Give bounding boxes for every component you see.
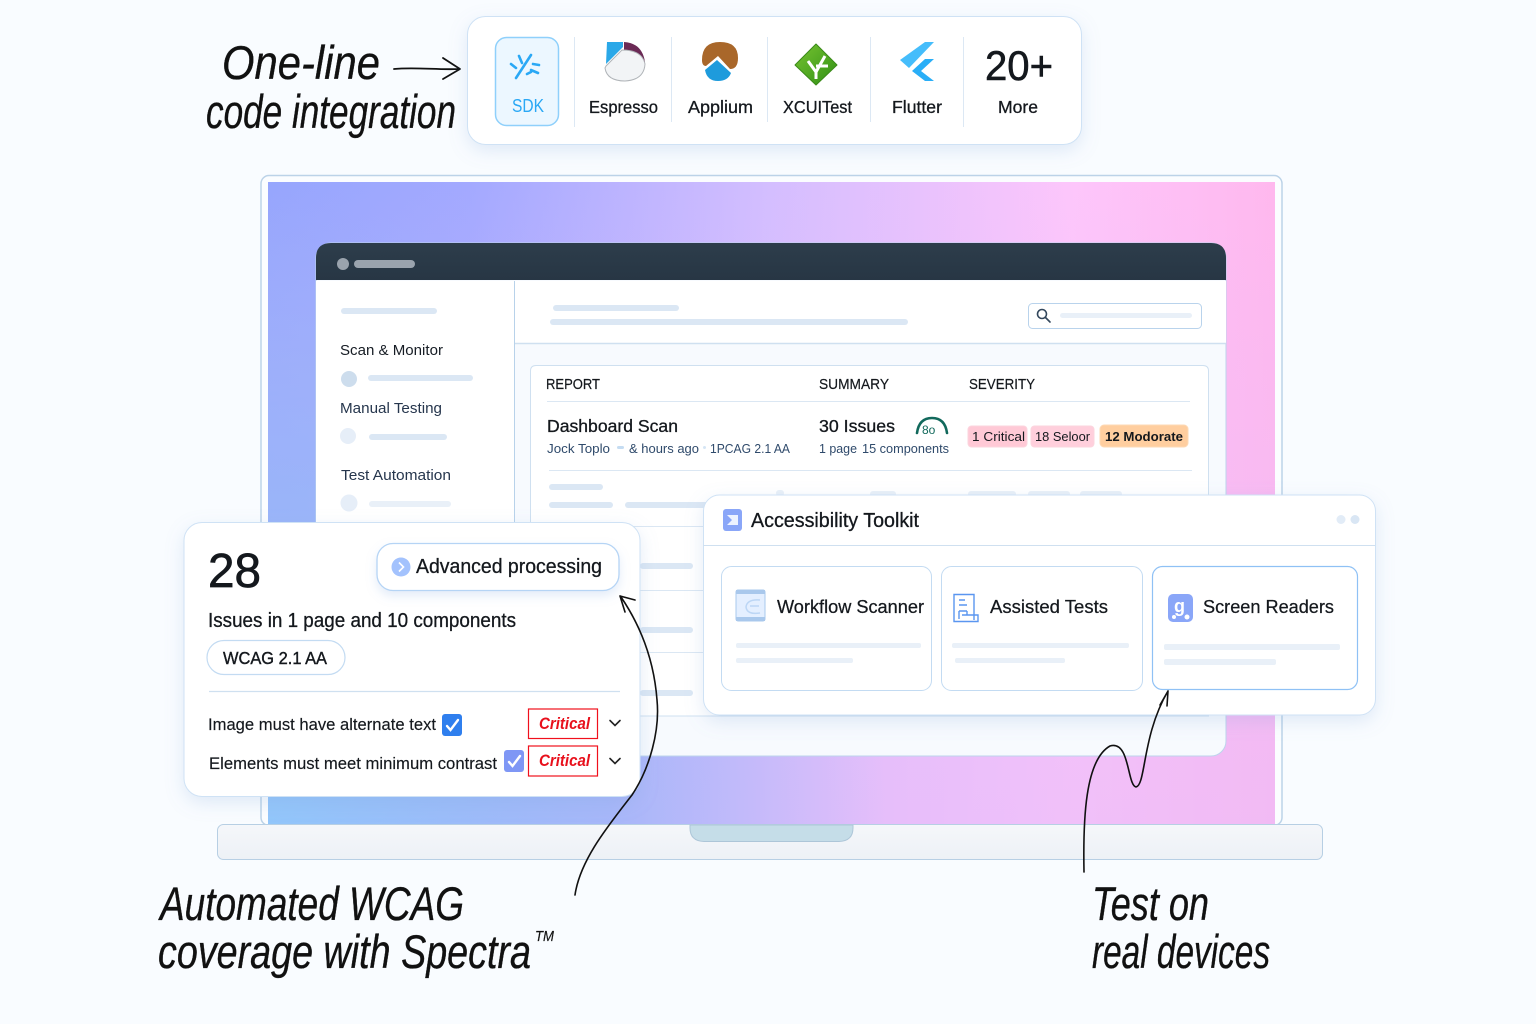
main header — [515, 281, 1226, 344]
report title and meta: & hours ago — [629, 441, 699, 456]
report card — [530, 366, 1208, 716]
handwritten note: automated WCAG coverage: coverage with Spectra — [158, 925, 531, 978]
table header — [546, 377, 1035, 393]
more count: 20+ — [985, 42, 1053, 89]
WCAG pill: WCAG 2.1 AA — [223, 648, 327, 668]
nav item: test automation: Test Automation — [341, 468, 451, 484]
tool card: screen readers: Screen Readers — [1203, 596, 1334, 617]
tool card: assisted tests — [942, 566, 1142, 690]
tool card: screen readers — [1152, 566, 1358, 690]
issue summary: 1 page — [819, 441, 857, 456]
table header: SEVERITY — [969, 377, 1035, 393]
table header: REPORT — [546, 377, 600, 393]
issue summary: 15 components — [862, 441, 949, 456]
icon: Flutter — [900, 42, 934, 81]
issue row: alternate text — [208, 709, 620, 738]
sidebar — [316, 281, 514, 581]
handwritten note: automated WCAG coverage — [158, 877, 554, 978]
icon: XCUITest — [795, 44, 837, 85]
icon: Applium — [702, 42, 738, 81]
panel: integrations: XCUITest — [783, 97, 852, 117]
laptop — [218, 176, 1322, 860]
placeholder rows — [531, 484, 1122, 696]
laptop screen gradient — [268, 182, 1275, 824]
more count: More — [998, 97, 1038, 117]
report title and meta: Dashboard Scan — [547, 416, 678, 436]
report title and meta — [547, 416, 790, 456]
handwritten note: test on real devices — [1092, 877, 1270, 978]
advanced processing pill: Advanced processing — [416, 556, 602, 578]
nav item: scan and monitor: Scan & Monitor — [340, 343, 443, 359]
arrow: test on real devices note to screen readers — [1084, 691, 1168, 872]
issue summary: 30 Issues — [819, 416, 895, 436]
search box — [1028, 304, 1202, 328]
issue summary: 8o — [922, 423, 936, 437]
toolkit header — [723, 509, 1360, 532]
issue row: minimum contrast: Critical — [539, 751, 591, 770]
more count — [985, 42, 1053, 117]
panel: WCAG issues — [184, 522, 640, 796]
tool card: assisted tests: Assisted Tests — [990, 596, 1108, 617]
severity badges — [968, 425, 1188, 447]
handwritten note: automated WCAG coverage: TM — [535, 928, 554, 945]
issue row: alternate text: Critical — [539, 714, 591, 733]
laptop bezel — [261, 176, 1282, 826]
WCAG pill — [207, 640, 345, 674]
laptop base — [218, 824, 1322, 860]
panel: integrations: Applium — [688, 97, 753, 117]
panel: integrations: Espresso — [589, 97, 658, 117]
app window — [316, 243, 1226, 756]
nav item: manual testing: Manual Testing — [340, 401, 442, 417]
issue row: minimum contrast: Elements must meet minimum contrast — [209, 755, 497, 773]
issue row: alternate text: Image must have alternate text — [208, 716, 436, 734]
advanced processing pill — [377, 544, 619, 590]
toolkit header: Accessibility Toolkit — [751, 510, 919, 532]
tool card: workflow scanner — [722, 566, 932, 690]
panel: integrations: Flutter — [892, 97, 942, 117]
panel: integrations — [468, 16, 1082, 144]
issue description: Issues in 1 page and 10 components — [208, 610, 516, 632]
handwritten note: automated WCAG coverage: Automated WCAG — [158, 877, 464, 930]
report title and meta: Jock Toplo — [547, 441, 610, 456]
handwritten note: one-line code integration: One-line — [222, 36, 380, 89]
issue summary — [819, 416, 949, 456]
arrow: one-line note to integrations — [394, 58, 460, 79]
handwritten note: one-line code integration: code integration — [206, 85, 456, 138]
dividers — [574, 37, 964, 127]
handwritten note: test on real devices: real devices — [1092, 925, 1270, 978]
severity badges: 12 Modorate — [1105, 429, 1183, 444]
handwritten note: one-line code integration — [206, 36, 456, 138]
issue row: minimum contrast — [209, 746, 620, 776]
tool card: screen readers: g — [1174, 596, 1185, 616]
SDK tile: SDK — [512, 96, 544, 116]
severity badges: 1 Critical — [972, 429, 1025, 444]
icon: Espresso — [605, 42, 645, 81]
severity badges: 18 Seloor — [1035, 429, 1091, 444]
SDK tile — [496, 38, 558, 126]
panel: accessibility toolkit — [703, 495, 1376, 715]
handwritten note: test on real devices: Test on — [1092, 877, 1209, 930]
arrow: Automated WCAG note to advanced processing — [575, 596, 658, 895]
tool card: workflow scanner: Workflow Scanner — [777, 596, 924, 617]
title bar — [316, 243, 1226, 280]
table header: SUMMARY — [819, 377, 889, 393]
report title and meta: 1PCAG 2.1 AA — [710, 441, 790, 456]
issue count: 28 — [208, 545, 261, 598]
